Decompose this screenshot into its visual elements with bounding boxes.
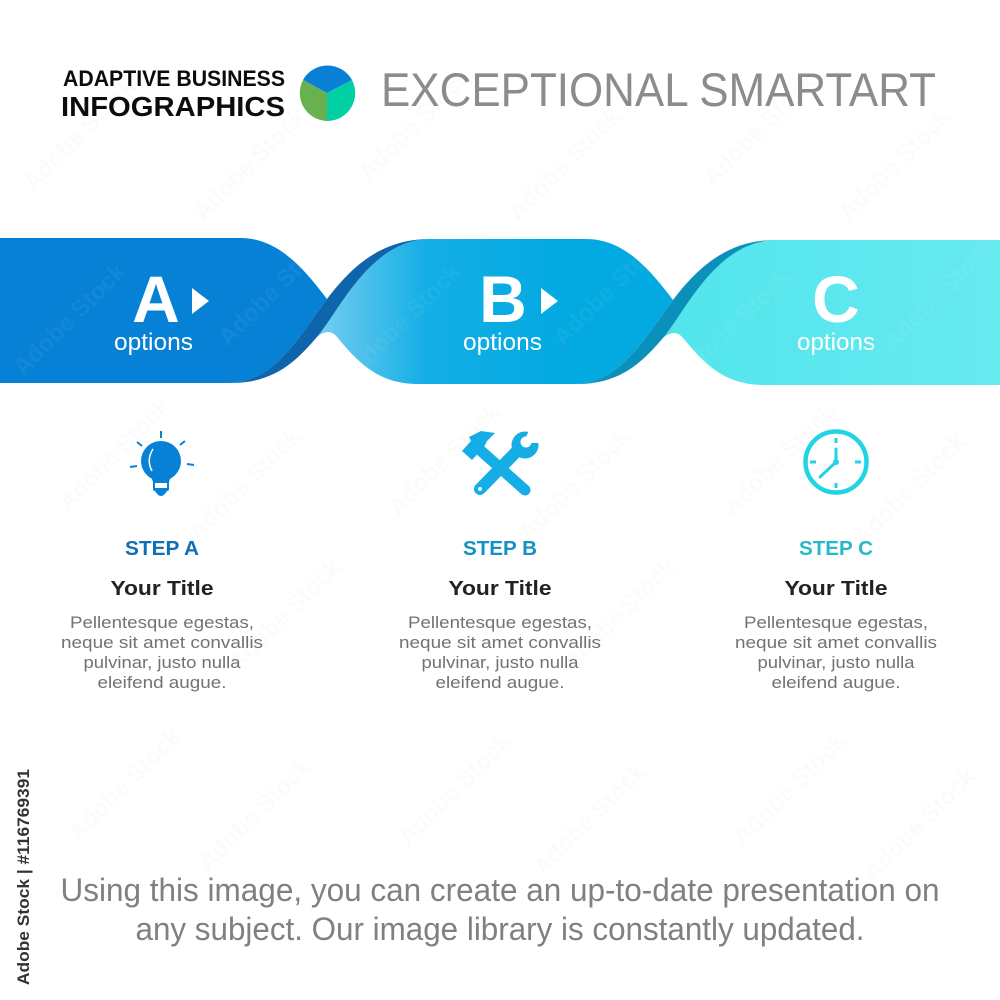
band label B: B <box>479 262 527 336</box>
watermark pattern: Adobe Stock <box>848 428 972 551</box>
icon: light bulb <box>130 431 194 496</box>
watermark pattern: Adobe Stock <box>53 393 177 516</box>
watermark pattern: Adobe Stock <box>503 103 627 226</box>
watermark pattern: Adobe Stock <box>513 423 637 546</box>
header: brand title <box>61 66 285 122</box>
watermark pattern: Adobe Stock <box>728 728 852 851</box>
watermark pattern: Adobe Stock <box>183 423 307 546</box>
step C body <box>735 613 937 692</box>
header: brand title: INFOGRAPHICS <box>61 91 285 122</box>
watermark pattern: Adobe Stock <box>223 553 347 676</box>
step A body: Pellentesque egestas, <box>70 613 254 632</box>
footer text block <box>60 872 940 947</box>
watermark pattern: Adobe Stock <box>833 103 957 226</box>
icon: three-segment pie logo <box>300 66 355 121</box>
step B body <box>399 613 601 692</box>
icon: hammer and wrench <box>462 428 545 491</box>
step B title: Your Title <box>448 577 552 600</box>
band segment B <box>317 239 673 384</box>
band segment C <box>663 240 1000 385</box>
watermark pattern: Adobe Stock <box>353 63 477 186</box>
icon: clock <box>806 432 866 492</box>
watermark pattern: Adobe Stock <box>698 68 822 191</box>
watermark on band: Adobe Stock <box>213 228 337 351</box>
step B body: neque sit amet convallis <box>399 633 601 652</box>
watermark on band: Adobe Stock <box>878 233 1000 356</box>
watermark on band <box>8 228 1000 386</box>
ribbon fold: A to B <box>228 239 430 383</box>
watermark pattern: Adobe Stock <box>188 103 312 226</box>
step A heading: STEP A <box>125 538 199 560</box>
column: step C <box>735 538 937 692</box>
watermark pattern: Adobe Stock <box>63 723 187 846</box>
column: step B <box>399 538 601 692</box>
watermark pattern: Adobe Stock <box>718 398 842 521</box>
step B body: pulvinar, justo nulla <box>422 653 579 672</box>
watermark pattern: Adobe Stock <box>193 753 317 876</box>
step C heading: STEP C <box>799 538 873 560</box>
heading: exceptional smartart: EXCEPTIONAL SMARTART <box>381 63 936 116</box>
watermark pattern <box>18 63 982 886</box>
step C body: neque sit amet convallis <box>735 633 937 652</box>
step C body: Pellentesque egestas, <box>744 613 928 632</box>
watermark on band: Adobe Stock <box>8 258 132 381</box>
step B heading: STEP B <box>463 538 537 560</box>
step A body <box>61 613 263 692</box>
band label A: A <box>132 262 180 336</box>
band label C: C <box>812 262 860 336</box>
band label C: options <box>797 329 875 356</box>
step C title: Your Title <box>784 577 888 600</box>
step A body: pulvinar, justo nulla <box>84 653 241 672</box>
step B body: Pellentesque egestas, <box>408 613 592 632</box>
step C body: pulvinar, justo nulla <box>758 653 915 672</box>
band label A <box>114 262 209 356</box>
step A body: neque sit amet convallis <box>61 633 263 652</box>
step A title: Your Title <box>110 577 214 600</box>
watermark on band: Adobe Stock <box>548 228 672 351</box>
step A body: eleifend augue. <box>98 673 226 692</box>
band label B: options <box>463 329 542 356</box>
footer text block: any subject. Our image library is constantly updated. <box>136 911 864 947</box>
watermark pattern: Adobe Stock <box>558 553 682 676</box>
footer text block: Using this image, you can create an up-to-date presentation on <box>60 872 940 908</box>
stock credit: Adobe Stock | #116769391 <box>14 769 33 985</box>
watermark pattern: Adobe Stock <box>528 758 652 881</box>
watermark on band: Adobe Stock <box>343 258 467 381</box>
ribbon band: three connected segments <box>0 238 1000 385</box>
column: step A <box>61 538 263 692</box>
watermark pattern: Adobe Stock <box>858 763 982 886</box>
watermark pattern: Adobe Stock <box>18 73 142 196</box>
watermark on band: Adobe Stock <box>673 263 797 386</box>
band segment A <box>0 238 327 383</box>
band label A: options <box>114 329 193 356</box>
watermark pattern: Adobe Stock <box>383 398 507 521</box>
watermark pattern: Adobe Stock <box>393 728 517 851</box>
ribbon fold: B to C <box>574 240 776 384</box>
header: brand title: ADAPTIVE BUSINESS <box>63 66 285 91</box>
band label B <box>463 262 558 356</box>
band label C <box>797 262 875 356</box>
step B body: eleifend augue. <box>436 673 564 692</box>
step C body: eleifend augue. <box>772 673 900 692</box>
